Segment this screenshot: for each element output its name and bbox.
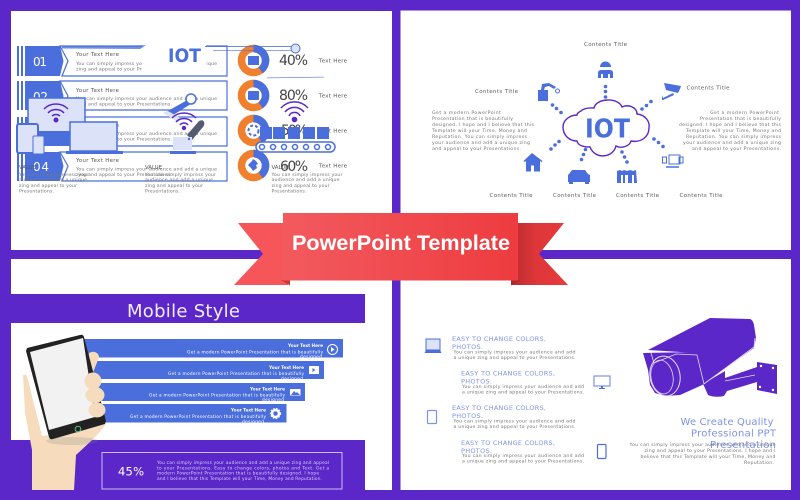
icon: house — [524, 153, 542, 172]
feature 3: a unique zing and appeal to your Presentations. — [454, 424, 576, 430]
value block 3: Presentations. — [272, 188, 306, 194]
icon: factory — [617, 170, 637, 183]
icon: robot arm small — [538, 83, 560, 101]
row 2 numbered banner: 02 — [33, 90, 48, 104]
row 1 numbered banner: You can simply impress your audience and add a unique — [75, 61, 217, 67]
left paragraph: and appeal to your Presentations. — [432, 146, 521, 152]
stat box — [102, 452, 342, 489]
ribbon left tail — [234, 223, 288, 285]
heading: we create quality: Professional PPT — [691, 428, 777, 440]
icon: connected devices — [17, 98, 123, 154]
right paragraph: Get a modern PowerPoint — [710, 110, 779, 116]
feature 1: PHOTOS. — [452, 343, 483, 351]
ribbon main band — [283, 213, 518, 280]
row 1 numbered banner: Your Text Here — [75, 52, 120, 58]
left paragraph: designed. I hope and I believe that this — [432, 122, 535, 128]
panel: top right slide — [400, 10, 791, 250]
bar 4: Your Text Here — [230, 408, 266, 414]
row 1 numbered banner — [17, 46, 227, 76]
feature 2: a unique zing and appeal to your Presentations. — [462, 390, 584, 396]
contents titles around the cloud: Contents Title — [680, 193, 723, 199]
heading: we create quality — [680, 417, 777, 451]
row 3 numbered banner: zing and appeal to your Presentations. — [76, 136, 172, 142]
header band: Mobile Style — [127, 301, 240, 322]
cloud with IOT — [563, 100, 649, 156]
bar 1: Get a modern PowerPoint Presentation that is beautifully — [187, 350, 323, 356]
stat box: and I believe that this Template will your Time, Money and Reputation. — [157, 476, 322, 482]
feature 4 — [461, 439, 606, 464]
contents titles around the cloud — [475, 42, 730, 199]
bar 1 — [80, 339, 343, 360]
stat box: modern PowerPoint Presentation that is beautifully designed. I hope — [157, 470, 319, 476]
feature 2 — [461, 370, 610, 396]
donut 60 percent — [242, 150, 348, 178]
feature 1: a unique zing and appeal to your Presentations. — [454, 355, 576, 361]
bar 1: designed — [300, 354, 322, 360]
cloud with IOT: IOT — [585, 114, 630, 144]
donut 60 percent: Text Here — [318, 164, 348, 170]
left paragraph: Reputation. You can simply impress — [432, 134, 528, 140]
feature 1: You can simply impress your audience and add — [452, 350, 576, 356]
IOT logo with circuit lines — [62, 44, 324, 78]
right paragraph: Presentation that is beautifully — [700, 116, 781, 122]
contents titles around the cloud: Contents Title — [584, 42, 628, 48]
icon: worker — [598, 62, 613, 78]
panel: top left slide — [11, 11, 392, 250]
feature 3: You can simply impress your audience and add — [452, 418, 576, 424]
stat box: You can simply impress your audience and add a unique zing and appeal — [156, 460, 329, 466]
right paragraph — [679, 110, 782, 152]
feature 4: a unique zing and appeal to your Presentations. — [462, 458, 584, 464]
bar 4 — [95, 404, 286, 425]
feature 3: EASY TO CHANGE COLORS, — [452, 404, 546, 412]
left paragraph: Presentation that is beautifully — [432, 116, 513, 122]
bar 3: designed — [262, 397, 284, 403]
value block 2: Presentations. — [145, 188, 180, 194]
value block 3 — [270, 165, 343, 194]
row 4 numbered banner — [17, 152, 227, 181]
feature 2: PHOTOS. — [461, 378, 492, 386]
value block 3: audience and add a unique — [272, 177, 340, 183]
icon: conveyor belt — [256, 102, 335, 152]
ribbon right tail — [511, 223, 568, 285]
panel: bottom left slide — [11, 259, 392, 490]
row 1 numbered banner: 01 — [33, 55, 47, 69]
ribbon banner — [234, 213, 568, 286]
donut 40 percent — [242, 45, 348, 73]
feature 2: EASY TO CHANGE COLORS, — [461, 370, 555, 378]
stat box: 45% — [118, 464, 144, 478]
icon: devices small — [662, 155, 683, 167]
donut 50 percent — [242, 115, 348, 143]
description paragraph: believe that this Template will your Time, Money and — [640, 454, 776, 460]
contents titles around the cloud: Contents Title — [686, 86, 730, 92]
bar 3: Your Text Here — [249, 386, 285, 392]
ribbon title: PowerPoint Template — [292, 232, 510, 255]
right paragraph: designed. I hope and I believe that this — [679, 122, 782, 128]
bar 4: designed — [242, 419, 264, 425]
row 4 numbered banner: Your Text Here — [75, 158, 120, 164]
value block 2: VALUE — [145, 165, 163, 171]
donut 80 percent: Text Here — [318, 94, 348, 100]
feature 4: EASY TO CHANGE COLORS, — [461, 439, 555, 447]
feature 1 — [424, 335, 576, 361]
row 2 numbered banner: zing and appeal to your Presentations. — [76, 102, 172, 108]
row 4 numbered banner: zing and appeal to your Presentations. — [76, 172, 172, 178]
donut 50 percent: 50% — [281, 123, 308, 139]
row 3 numbered banner: Your Text Here — [75, 123, 120, 129]
bar 2: Your Text Here — [268, 365, 304, 371]
contents titles around the cloud: Contents Title — [553, 193, 597, 199]
heading: we create quality: We Create Quality — [680, 417, 774, 428]
description paragraph: You can simply impress your audience and add a unique — [628, 442, 776, 448]
row 2 numbered banner — [17, 81, 227, 110]
donut 40 percent: 40% — [279, 53, 308, 69]
connector dots — [549, 85, 665, 164]
description paragraph: zing and appeal to your Presentations. I hope and I — [644, 448, 776, 454]
stat box: to your Presentations. Easy to change colors, photos and Text. Get a — [157, 466, 329, 472]
row 3 numbered banner: 03 — [33, 125, 48, 139]
IOT logo with circuit lines: IOT — [168, 45, 201, 67]
bar 3 — [95, 383, 305, 403]
row 3 numbered banner — [17, 117, 227, 146]
value block 2 — [144, 165, 216, 194]
donut 50 percent: Text Here — [318, 128, 348, 134]
value block 2: audience and add a unique — [145, 177, 213, 183]
row 2 numbered banner: Your Text Here — [75, 88, 120, 94]
bar 2: designed — [281, 376, 303, 382]
feature 3 — [428, 404, 576, 430]
contents titles around the cloud: Contents Title — [475, 89, 519, 95]
panel: bottom right slide — [400, 259, 791, 490]
value block 2: zing and appeal to your — [145, 183, 203, 189]
feature 4: You can simply impress your audience and add — [461, 453, 584, 459]
contents titles around the cloud: Contents Title — [616, 193, 660, 199]
value block 2: You can simply impress your — [144, 172, 216, 178]
bar 2: Get a modern PowerPoint Presentation that is beautifully — [168, 371, 304, 377]
row 3 numbered banner: You can simply impress your audience and add a unique — [75, 131, 217, 137]
row 1 numbered banner: zing and appeal to your Presentations. — [76, 66, 172, 72]
donut 80 percent — [242, 80, 348, 108]
icon: large security camera — [643, 318, 777, 398]
bar 1: Your Text Here — [287, 343, 323, 349]
bar 2 — [90, 361, 324, 382]
feature 4: PHOTOS. — [461, 447, 492, 455]
value block 3: VALUE — [272, 165, 289, 171]
header band — [11, 294, 365, 323]
donut 80 percent: 80% — [279, 88, 308, 104]
row 2 numbered banner: You can simply impress your audience and add a unique — [75, 96, 217, 102]
bar 3: Get a modern PowerPoint Presentation that is beautifully — [149, 392, 285, 398]
value block 1: zing and appeal to your — [19, 183, 77, 189]
description paragraph — [628, 442, 776, 466]
feature 1: EASY TO CHANGE COLORS, — [452, 335, 546, 343]
right paragraph: Reputation. You can simply impress — [686, 134, 782, 140]
value block 1: audience and add a unique — [19, 177, 87, 183]
ribbon folds — [281, 280, 520, 286]
icon: security camera small — [662, 83, 681, 100]
value block 3: You can simply impress your — [270, 172, 343, 178]
contents titles around the cloud: Contents Title — [490, 193, 533, 199]
illustration: hand holding phone — [23, 335, 106, 490]
value block 1: You can simply impress your — [18, 172, 89, 178]
left paragraph: Template will your Time, Money and — [431, 128, 527, 134]
description paragraph: Reputation. — [744, 460, 774, 466]
right paragraph: Template will your Time, Money and — [685, 128, 781, 134]
left paragraph — [431, 110, 535, 152]
right paragraph: your audience and add a unique zing — [683, 140, 781, 146]
left paragraph: Get a modern PowerPoint — [432, 110, 501, 116]
value block 3: zing and appeal to your — [272, 183, 330, 189]
value block 1: VALUE — [19, 165, 37, 171]
donut 60 percent: 60% — [280, 159, 308, 175]
icon: car — [568, 170, 590, 184]
feature 2: You can simply impress your audience and add — [461, 384, 584, 390]
donut 40 percent: Text Here — [318, 58, 348, 64]
row 4 numbered banner: 04 — [33, 160, 49, 174]
icon: robot arm — [163, 94, 204, 154]
heading: we create quality: Presentation — [710, 440, 776, 451]
value block 1: Presentations. — [19, 188, 54, 194]
right paragraph: and appeal to your Presentations. — [692, 146, 781, 152]
bar 4: Get a modern PowerPoint Presentation that is beautifully — [130, 414, 266, 420]
value block 1 — [18, 165, 89, 194]
row 4 numbered banner: You can simply impress your audience and add a unique — [75, 166, 217, 172]
left paragraph: your audience and add a unique zing — [432, 140, 530, 146]
bottom band — [11, 440, 365, 490]
feature 3: PHOTOS. — [452, 412, 483, 420]
